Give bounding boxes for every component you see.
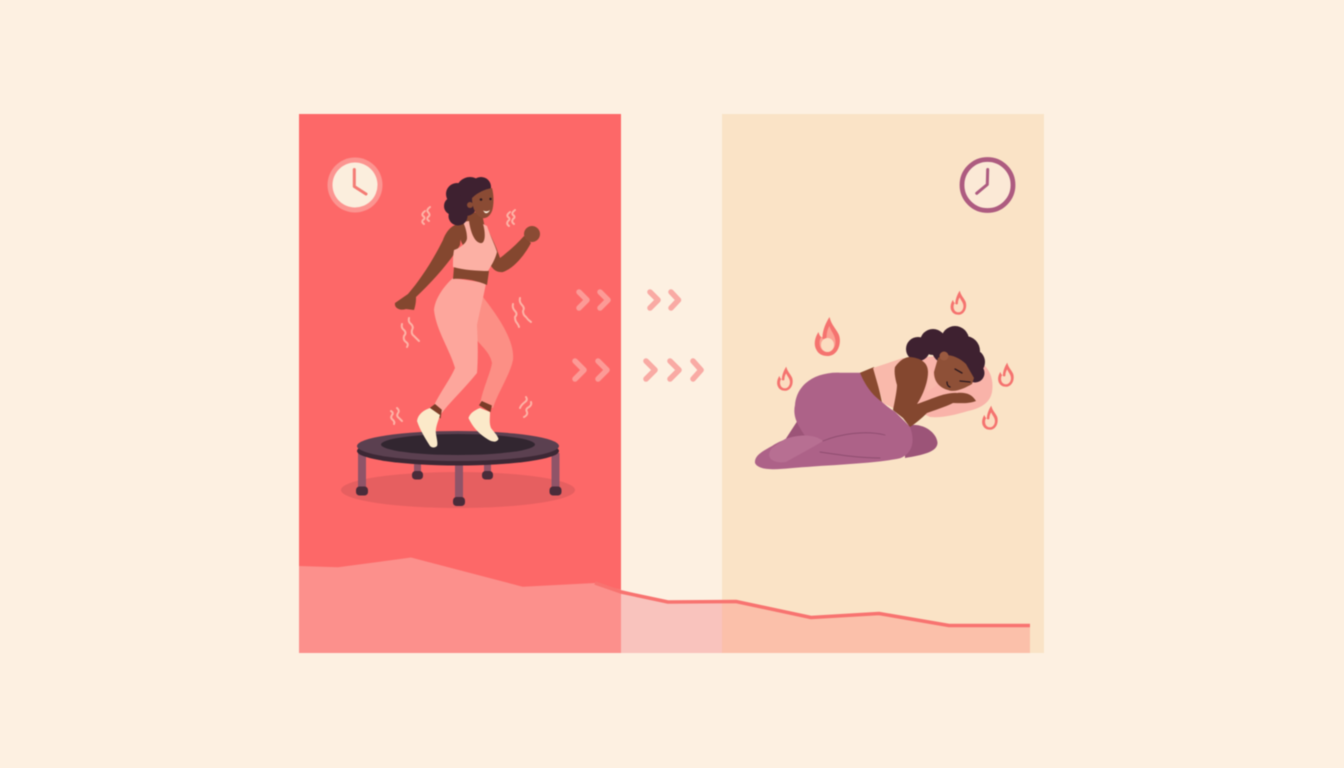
arrows: bottom row chevrons: [575, 361, 701, 379]
neck and chest: [460, 211, 487, 252]
arm and hand: [893, 357, 976, 427]
hair: [444, 177, 491, 226]
back leg: [470, 290, 513, 408]
ear: [467, 202, 473, 208]
crop top: [873, 358, 928, 410]
smile: [483, 210, 490, 213]
panel: resting state: [722, 114, 1044, 653]
trampoline shadow: [341, 472, 575, 508]
eyes: [480, 198, 492, 201]
midriff: [453, 267, 489, 285]
pants fold lines: [820, 433, 885, 458]
closed eyes and mouth: [947, 369, 970, 387]
right arm: [486, 226, 531, 272]
sports bra: [453, 221, 497, 271]
trampoline front legs: [358, 453, 560, 498]
icon: right flame: [998, 363, 1014, 387]
fist: [524, 226, 540, 242]
chart trend line: [595, 583, 1030, 626]
foot shading: [769, 435, 823, 462]
icon: dark clock: [962, 160, 1013, 210]
pillow: [893, 356, 992, 417]
panel: active state: [299, 114, 621, 653]
hips and front leg: [433, 278, 486, 414]
face: [934, 355, 974, 391]
left ankle band: [431, 405, 441, 417]
midriff: [860, 367, 882, 402]
motion lines around jumping figure: [391, 207, 531, 424]
chart area in gap: [621, 590, 722, 653]
figure: woman lying down: [755, 326, 992, 469]
trampoline frame rim: [357, 436, 559, 466]
chart: declining energy line across panels: [299, 558, 1030, 653]
icon: top flame: [951, 291, 966, 315]
icon: lower flame: [982, 406, 998, 430]
trampoline front feet: [356, 486, 562, 506]
arrows: top row chevrons: [579, 292, 678, 308]
pants: [755, 373, 913, 469]
right sock: [468, 408, 498, 442]
left arm and hand: [395, 224, 462, 310]
neck strap: [927, 368, 937, 392]
icon: large flame: [815, 317, 840, 356]
left sock: [417, 408, 440, 448]
rear knee: [905, 425, 938, 458]
shaded crease behind thigh: [785, 420, 825, 445]
icon: light clock: [328, 158, 382, 212]
hair: [906, 326, 985, 382]
right ankle band: [480, 402, 491, 411]
chart area under resting panel: [722, 601, 1030, 653]
figure: woman jumping: [395, 177, 540, 448]
icon: left flame: [777, 367, 793, 391]
trampoline back legs: [414, 460, 491, 473]
chart area under active panel: [299, 558, 621, 653]
face: [472, 188, 494, 218]
trampoline: [341, 431, 575, 508]
trampoline mat: [381, 434, 535, 455]
trampoline back feet: [412, 471, 493, 480]
ear: [940, 352, 948, 360]
